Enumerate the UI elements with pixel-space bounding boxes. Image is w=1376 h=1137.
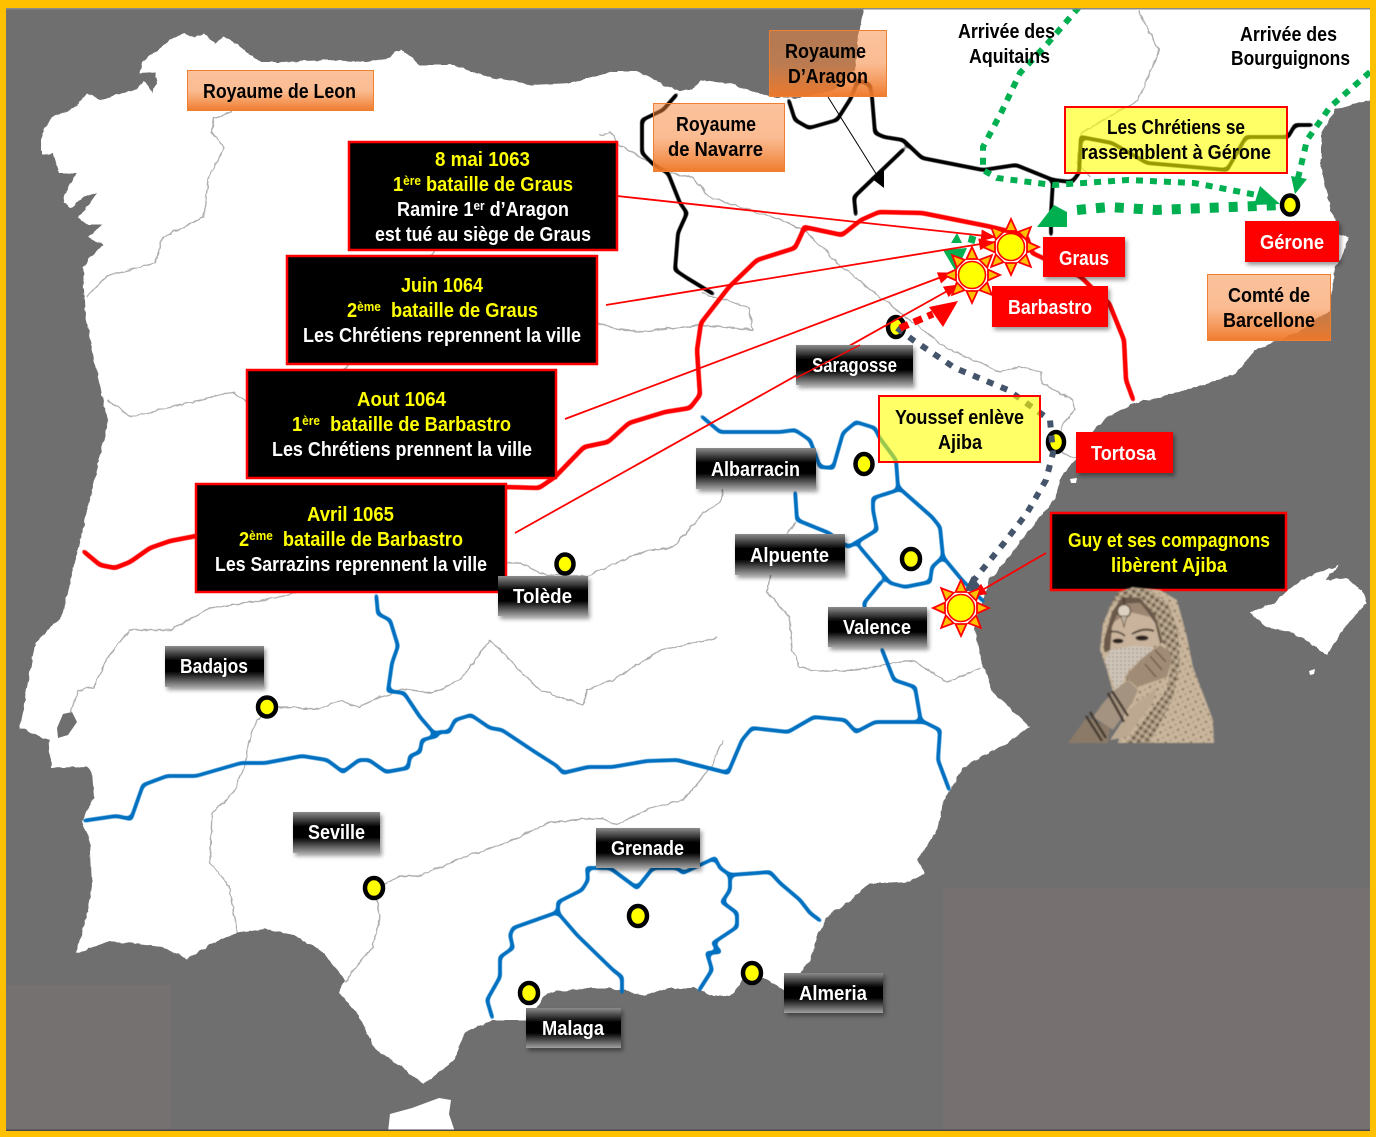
city label: Barbastro (992, 286, 1108, 327)
city label: Grenade: Grenade (611, 838, 684, 860)
city label: Tolede: Tolède (513, 586, 572, 608)
event box: Aout 1064: bataille de Barbastro (320, 414, 511, 436)
label: Royaume de Leon (188, 70, 374, 110)
label: Comte de Barcellone (1208, 274, 1330, 340)
Christian front line (82, 212, 1134, 568)
event box: Juin 1064: ème (357, 299, 381, 314)
event box: Aout 1064 (247, 370, 556, 478)
event box: Juin 1064: bataille de Graus (381, 300, 538, 322)
city label: Grenade (596, 828, 700, 868)
finger lines (1145, 650, 1166, 677)
callout connector lines (515, 196, 1046, 596)
border: Navarre (642, 93, 715, 295)
event box: Avril 1065: 2 (239, 529, 250, 551)
event box: Guy et ses compagnons: Guy et ses compagnons (1068, 530, 1270, 552)
city label: Valence: Valence (843, 617, 911, 639)
city label: Saragosse: Saragosse (812, 355, 897, 377)
city label: Albarracin: Albarracin (711, 459, 800, 481)
city marker: Seville (365, 878, 383, 898)
city label: Badajos: Badajos (180, 656, 248, 678)
city marker: Saragosse (888, 317, 904, 337)
city label: Seville: Seville (308, 822, 365, 844)
battle icon: Ajiba (933, 580, 989, 636)
forehead jewel (1118, 598, 1130, 627)
hood shadow (1104, 597, 1163, 652)
arrow: Aquitains route to Gerone (983, 7, 1280, 205)
event box: 8 mai 1063: est tué au siège de Graus (375, 224, 591, 246)
event box: Avril 1065 (196, 484, 506, 592)
hood band (1108, 587, 1180, 743)
kingdom borders (642, 80, 1314, 295)
event box: 8 mai 1063: d’Aragon (485, 199, 569, 221)
illustration: veiled woman (1068, 587, 1214, 743)
city label: Almeria (784, 973, 883, 1013)
forearm (1093, 680, 1138, 730)
callout: Les Chretiens se rassemblent a Gerone: Les Chrétiens se (1107, 117, 1245, 139)
city marker: Albarracin (856, 454, 872, 474)
city label: Gerone: Gérone (1260, 232, 1324, 254)
city label: Alpuente: Alpuente (750, 545, 829, 567)
label: Arrivee des Aquitains: Arrivée des (958, 21, 1055, 43)
eyes and brows (1110, 630, 1154, 643)
label: Comte de Barcellone: Barcellone (1223, 310, 1315, 332)
face (1110, 603, 1160, 652)
label: Arrivee des Bourguignons: Bourguignons (1231, 48, 1350, 70)
city label: Albarracin (696, 448, 816, 489)
callout: Les Chretiens se rassemblent a Gerone (1065, 107, 1287, 173)
event box: 8 mai 1063: bataille de Graus (421, 174, 573, 196)
label: Royaume d'Aragon: D’Aragon (788, 66, 868, 88)
hand (1125, 645, 1172, 687)
river: east central (437, 715, 950, 792)
label: Arrivee des Bourguignons: Arrivée des (1240, 24, 1337, 46)
label: Royaume de Navarre: de Navarre (668, 139, 763, 161)
event box: 8 mai 1063 (349, 142, 617, 250)
label: Royaume de Navarre (654, 104, 784, 172)
city label: Saragosse (796, 345, 913, 385)
river: Malaga branch (558, 913, 622, 995)
city marker: Alpuente (902, 549, 920, 569)
event box: Guy et ses compagnons (1051, 513, 1286, 590)
islets (1070, 478, 1315, 675)
callout: Les Chretiens se rassemblent a Gerone: rassemblent à Gérone (1081, 142, 1271, 164)
city label: Tolede (498, 576, 588, 616)
label: Comte de Barcellone: Comté de (1228, 285, 1310, 307)
event box: 8 mai 1063: Ramire 1 (397, 199, 482, 221)
city marker: Badajos (258, 698, 276, 716)
forehead shadow (1114, 603, 1150, 622)
city label: Tortosa (1076, 432, 1173, 473)
arrow: Saragosse to Barbastro (900, 301, 958, 328)
river: Valence branch (858, 545, 943, 587)
event box: Juin 1064: 2 (347, 300, 358, 322)
red line over Saragosse label (796, 345, 860, 378)
face veil (1105, 646, 1153, 695)
event box: Avril 1065: Les Sarrazins reprennent la ville (215, 554, 487, 576)
event box: 8 mai 1063: ère (403, 173, 421, 188)
label: Royaume de Navarre: Royaume (676, 114, 756, 136)
city label: Malaga: Malaga (542, 1018, 605, 1040)
arrow: Graus to Barbastro (943, 233, 973, 272)
border: Aragon north (788, 80, 1314, 182)
event box: Aout 1064: Les Chrétiens prennent la ville (272, 439, 532, 461)
callout: Youssef enleve Ajiba (879, 396, 1040, 462)
city label: Seville (293, 812, 380, 853)
river: Almeria branch (698, 875, 737, 992)
arrow: Aragon to Graus region (828, 97, 884, 188)
chest skin (1110, 687, 1157, 740)
city label: Malaga (526, 1008, 621, 1048)
city label: Tortosa: Tortosa (1091, 443, 1157, 465)
city label: Graus: Graus (1059, 248, 1109, 270)
event box: Juin 1064: Les Chrétiens reprennent la ville (303, 325, 581, 347)
label: Arrivee des Bourguignons (1231, 24, 1350, 70)
label: Arrivee des Aquitains (958, 21, 1055, 68)
label: Royaume d'Aragon: Royaume (785, 41, 866, 63)
bangles (1086, 691, 1128, 741)
city marker: Tortosa (1048, 432, 1064, 452)
Ceuta coast (388, 1098, 455, 1132)
city marker: Gerone (1282, 196, 1298, 214)
event box: Juin 1064 (287, 256, 597, 364)
battle icon: Graus (983, 219, 1039, 275)
arrow: Gerone to Graus (1037, 205, 1283, 227)
veil body (1100, 587, 1214, 743)
city marker: Grenade (629, 906, 647, 926)
city label: Alpuente (735, 534, 845, 575)
lower arm (1068, 717, 1110, 743)
river: Ebro border (700, 415, 985, 603)
callout: Youssef enleve Ajiba: Youssef enlève (895, 407, 1024, 429)
label: Arrivee des Aquitains: Aquitains (969, 46, 1050, 68)
city label: Almeria: Almeria (799, 983, 868, 1005)
event box: 8 mai 1063: er (473, 198, 485, 213)
city label: Graus (1043, 237, 1125, 277)
city label: Valence (828, 607, 927, 647)
river: central (82, 593, 437, 821)
event box: Aout 1064: ère (302, 413, 320, 428)
arrow: Saracen route Saragosse to Ajiba (897, 328, 1053, 592)
event box: 8 mai 1063: 8 mai 1063 (435, 149, 530, 171)
river: Grenade north (487, 858, 822, 1020)
battle icon: Barbastro (944, 247, 1000, 303)
city label: Barbastro: Barbastro (1008, 297, 1092, 319)
event box: Aout 1064: Aout 1064 (357, 389, 447, 411)
city marker: Almeria (743, 963, 761, 983)
event box: Avril 1065: bataille de Barbastro (273, 529, 463, 551)
event box: Avril 1065: Avril 1065 (307, 504, 394, 526)
river: Valence south (864, 580, 921, 722)
border: Aragon south (854, 148, 905, 217)
Tagus estuary (57, 712, 77, 738)
callout: Youssef enleve Ajiba: Ajiba (938, 432, 983, 454)
label: Royaume de Leon: Royaume de Leon (203, 81, 356, 103)
event box: Juin 1064: Juin 1064 (401, 275, 484, 297)
city label: Badajos (165, 646, 264, 687)
label: Royaume d'Aragon (770, 30, 886, 96)
Mallorca (1250, 565, 1366, 655)
event box: Avril 1065: ème (249, 528, 273, 543)
regional boundaries (71, 10, 1159, 982)
city marker: Tolede (556, 554, 574, 574)
arrow: Bourguignons route to Gerone (1291, 72, 1370, 194)
event box: 8 mai 1063: 1 (393, 174, 404, 196)
event box: Guy et ses compagnons: libèrent Ajiba (1111, 555, 1228, 577)
river: Alpuente branch (795, 490, 898, 547)
rivers (82, 415, 985, 1020)
city label: Gerone (1245, 221, 1339, 262)
border: Graus (1051, 180, 1053, 237)
city marker: Malaga (520, 983, 538, 1003)
event box: Aout 1064: 1 (292, 414, 303, 436)
